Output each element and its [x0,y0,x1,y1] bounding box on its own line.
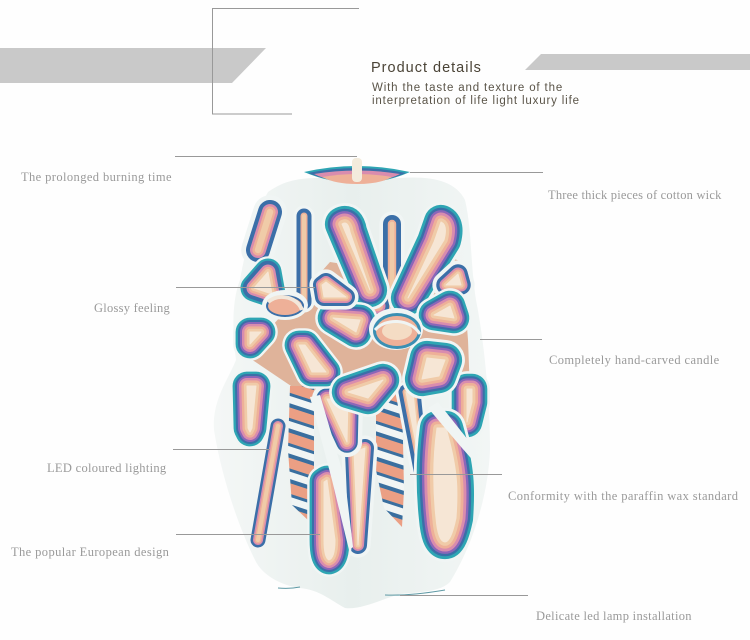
long centre strip [354,448,365,545]
central knot [369,308,423,350]
candle body [214,178,490,608]
upper slots [258,212,392,312]
label: hand-carved: Completely hand-carved candle [549,353,720,367]
label: glossy feeling: Glossy feeling [94,301,170,315]
subheading: With the taste and texture of the [372,82,563,94]
title bracket [212,8,359,114]
left sliver [258,426,278,540]
subheading: interpretation of life light luxury life [372,95,580,107]
lower left loop [247,386,256,432]
label: European design: The popular European design [11,545,169,559]
label: cotton wick: Three thick pieces of cotton wick [548,188,722,202]
small left knot [262,290,308,320]
upper right bow loop [446,274,461,285]
left lower bow petal [250,332,261,344]
bow under-layer [245,250,470,392]
base shadow lines [278,587,445,595]
side ribbon petal [467,389,472,422]
lower right bow petal [422,358,445,379]
lower horizontal bow petal [348,380,383,398]
upper left bow loop [254,272,272,294]
right bow petal [434,306,454,318]
right grey band [525,54,750,70]
subheading [372,82,580,107]
middle bow petal [333,318,360,332]
twisted columns [288,386,404,527]
label: paraffin wax: Conformity with the paraffin wax standard [508,489,738,503]
upper centre bow petal [322,282,346,297]
label: led lamp: Delicate led lamp installation [536,609,692,623]
heading: Product details [371,60,482,76]
white ribbons [310,395,477,550]
right strip [406,392,421,470]
left grey band [0,48,266,83]
upper arches [342,222,445,298]
label: LED lighting: LED coloured lighting [47,461,166,475]
leader lines [173,156,543,596]
hanging V petal [327,399,348,442]
candle top rim [304,158,410,184]
lower centre bow petal [299,345,326,372]
label: burning time: The prolonged burning time [21,170,172,184]
candle [214,158,490,608]
lower middle teardrop [324,480,335,560]
large right teardrop [434,428,457,542]
